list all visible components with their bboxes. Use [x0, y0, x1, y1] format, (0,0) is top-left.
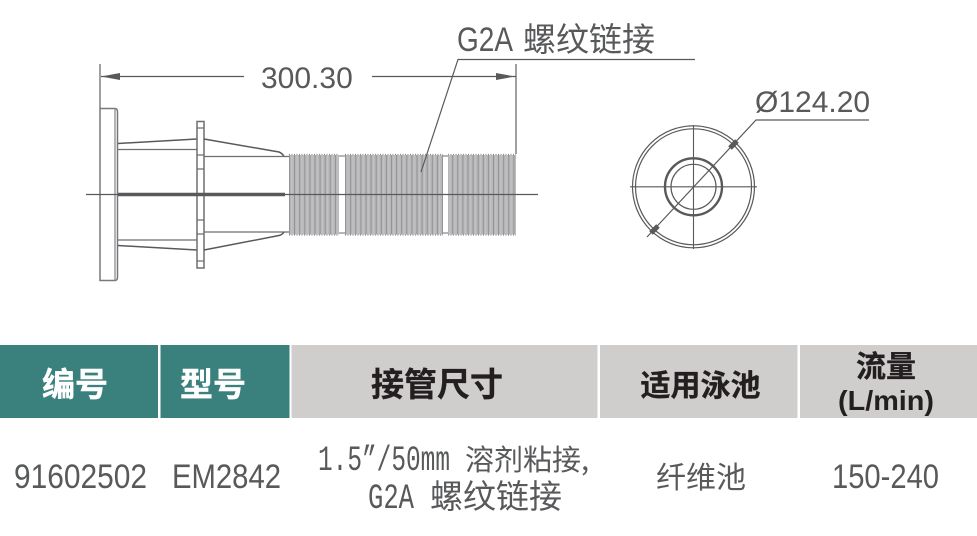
dimension: overall length: 300.30 [261, 62, 353, 95]
header cell: 型号 [160, 345, 290, 418]
dimension: overall length [100, 62, 516, 154]
cell: pool type: 纤维池 [656, 453, 746, 497]
header cell: 流量: 流量 [856, 342, 916, 386]
callout: thread type: G2A [457, 21, 513, 59]
centre line [86, 194, 538, 196]
front view technical drawing [630, 125, 757, 249]
cell: connection size: G2A [368, 479, 414, 519]
cell: item number: 91602502 [14, 458, 147, 496]
table header [0, 342, 977, 418]
table data row [14, 437, 939, 519]
cell: connection size: 螺纹链接 [430, 470, 562, 518]
callout: thread type: 螺纹链接 [523, 13, 655, 61]
collar [197, 122, 204, 268]
cell: connection size [318, 437, 589, 519]
side view technical drawing [86, 108, 538, 280]
header cell: 适用泳池: 适用泳池 [640, 361, 760, 405]
header cell: 适用泳池 [600, 345, 798, 418]
header cell: 流量 [800, 342, 977, 418]
tapered body, right of collar [204, 139, 289, 250]
header cell: 流量: (L/min) [838, 385, 934, 416]
tapered body, left of collar [118, 139, 197, 250]
flange [100, 108, 118, 280]
cell: model: EM2842 [172, 458, 281, 496]
threaded section [289, 154, 516, 235]
callout: thread type [421, 13, 695, 172]
header cell: 接管尺寸: 接管尺寸 [371, 358, 503, 406]
dimension: diameter: Ø124.20 [755, 86, 870, 119]
header cell: 编号 [0, 345, 158, 418]
header cell: 型号: 型号 [180, 358, 246, 406]
header cell: 编号: 编号 [42, 358, 108, 406]
cell: connection size: 溶剂粘接, [465, 437, 589, 479]
header cell: 接管尺寸 [292, 345, 598, 418]
cell: flow rate: 150-240 [832, 458, 939, 496]
cell: connection size: 1.5”/50mm [318, 441, 450, 481]
dimension: diameter [647, 86, 870, 237]
